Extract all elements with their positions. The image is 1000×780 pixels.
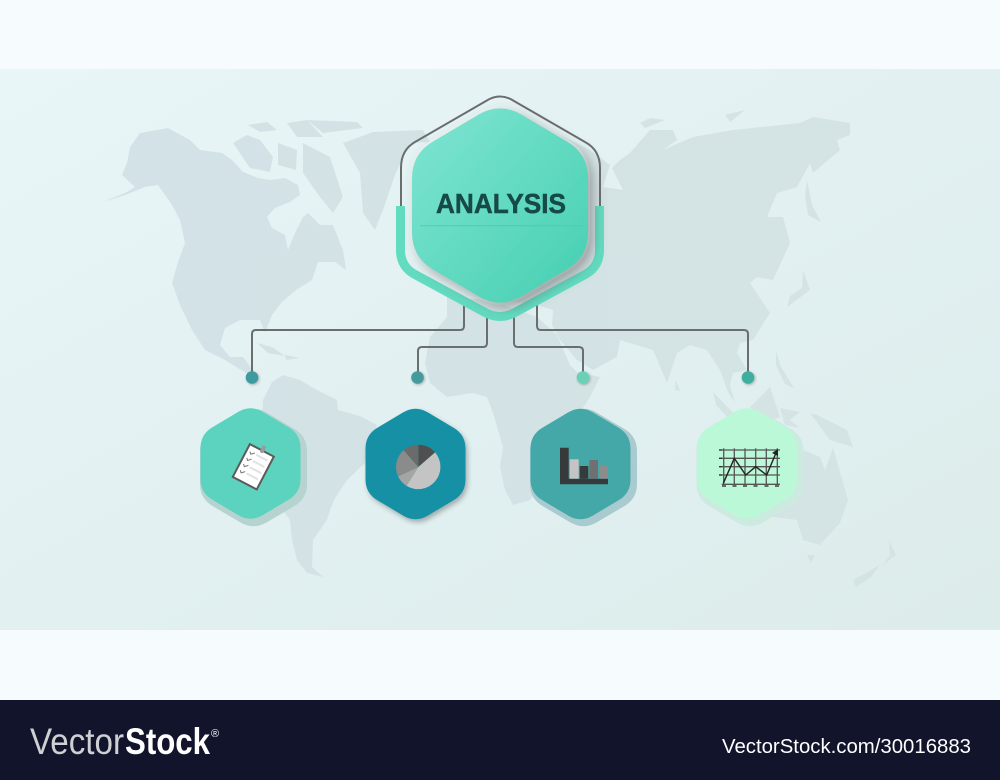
map: New Guinea — [780, 408, 853, 447]
connector 4 — [537, 305, 748, 372]
map: Greenland — [343, 130, 430, 230]
footer logo: Vector — [30, 721, 124, 762]
card 1: clipboard — [200, 408, 307, 526]
map: North America — [103, 128, 346, 377]
world map — [103, 110, 896, 587]
card 2: pie chart — [366, 409, 466, 519]
map: Tasmania and New Zealand — [807, 541, 896, 587]
card 3 backing — [530, 409, 637, 526]
connector 1 — [252, 305, 464, 372]
map: South America — [260, 375, 377, 577]
map: Australia — [760, 448, 848, 545]
footer bar — [0, 700, 1000, 780]
card 4 backing — [696, 409, 804, 526]
top band — [0, 0, 1000, 69]
hexagon halo — [410, 106, 590, 305]
icon: line chart — [719, 448, 780, 486]
central hexagon — [412, 108, 588, 303]
footer logo — [30, 721, 219, 762]
card 4: line chart — [696, 408, 804, 526]
card 1 backing — [200, 409, 307, 526]
card 3 hexagon — [530, 409, 630, 519]
footer url: VectorStock.com/30016883 — [722, 736, 971, 758]
map: Africa — [425, 297, 600, 505]
map: Eurasia — [450, 117, 850, 403]
bottom band — [0, 630, 1000, 700]
dot 4 — [742, 371, 754, 384]
diagram connectors — [252, 305, 748, 372]
card 2 hexagon — [366, 409, 466, 519]
connector 3 — [514, 316, 583, 372]
dot 3 — [577, 371, 589, 384]
dot 2 — [411, 371, 424, 384]
footer logo: ® — [211, 728, 219, 740]
title: ANALYSIS — [436, 188, 566, 219]
map: Arctic islands — [233, 120, 363, 213]
background panel — [0, 69, 1000, 630]
connector 2 — [418, 316, 487, 372]
icon: clipboard — [233, 439, 276, 489]
map: Caribbean — [257, 343, 300, 360]
card 3: bar chart — [530, 409, 637, 526]
icon: bar chart — [560, 448, 608, 484]
main hexagon group — [400, 96, 600, 316]
dot 1 — [246, 371, 258, 384]
divider line — [420, 225, 583, 227]
lower teal frame — [400, 206, 600, 316]
icon: pie chart — [396, 445, 440, 489]
card 1 hexagon — [200, 408, 300, 519]
connector dots — [246, 371, 754, 384]
map: Asian islands — [640, 110, 821, 425]
card 4 hexagon — [697, 408, 797, 519]
top outline frame — [401, 96, 600, 206]
footer logo: Stock — [125, 721, 210, 762]
